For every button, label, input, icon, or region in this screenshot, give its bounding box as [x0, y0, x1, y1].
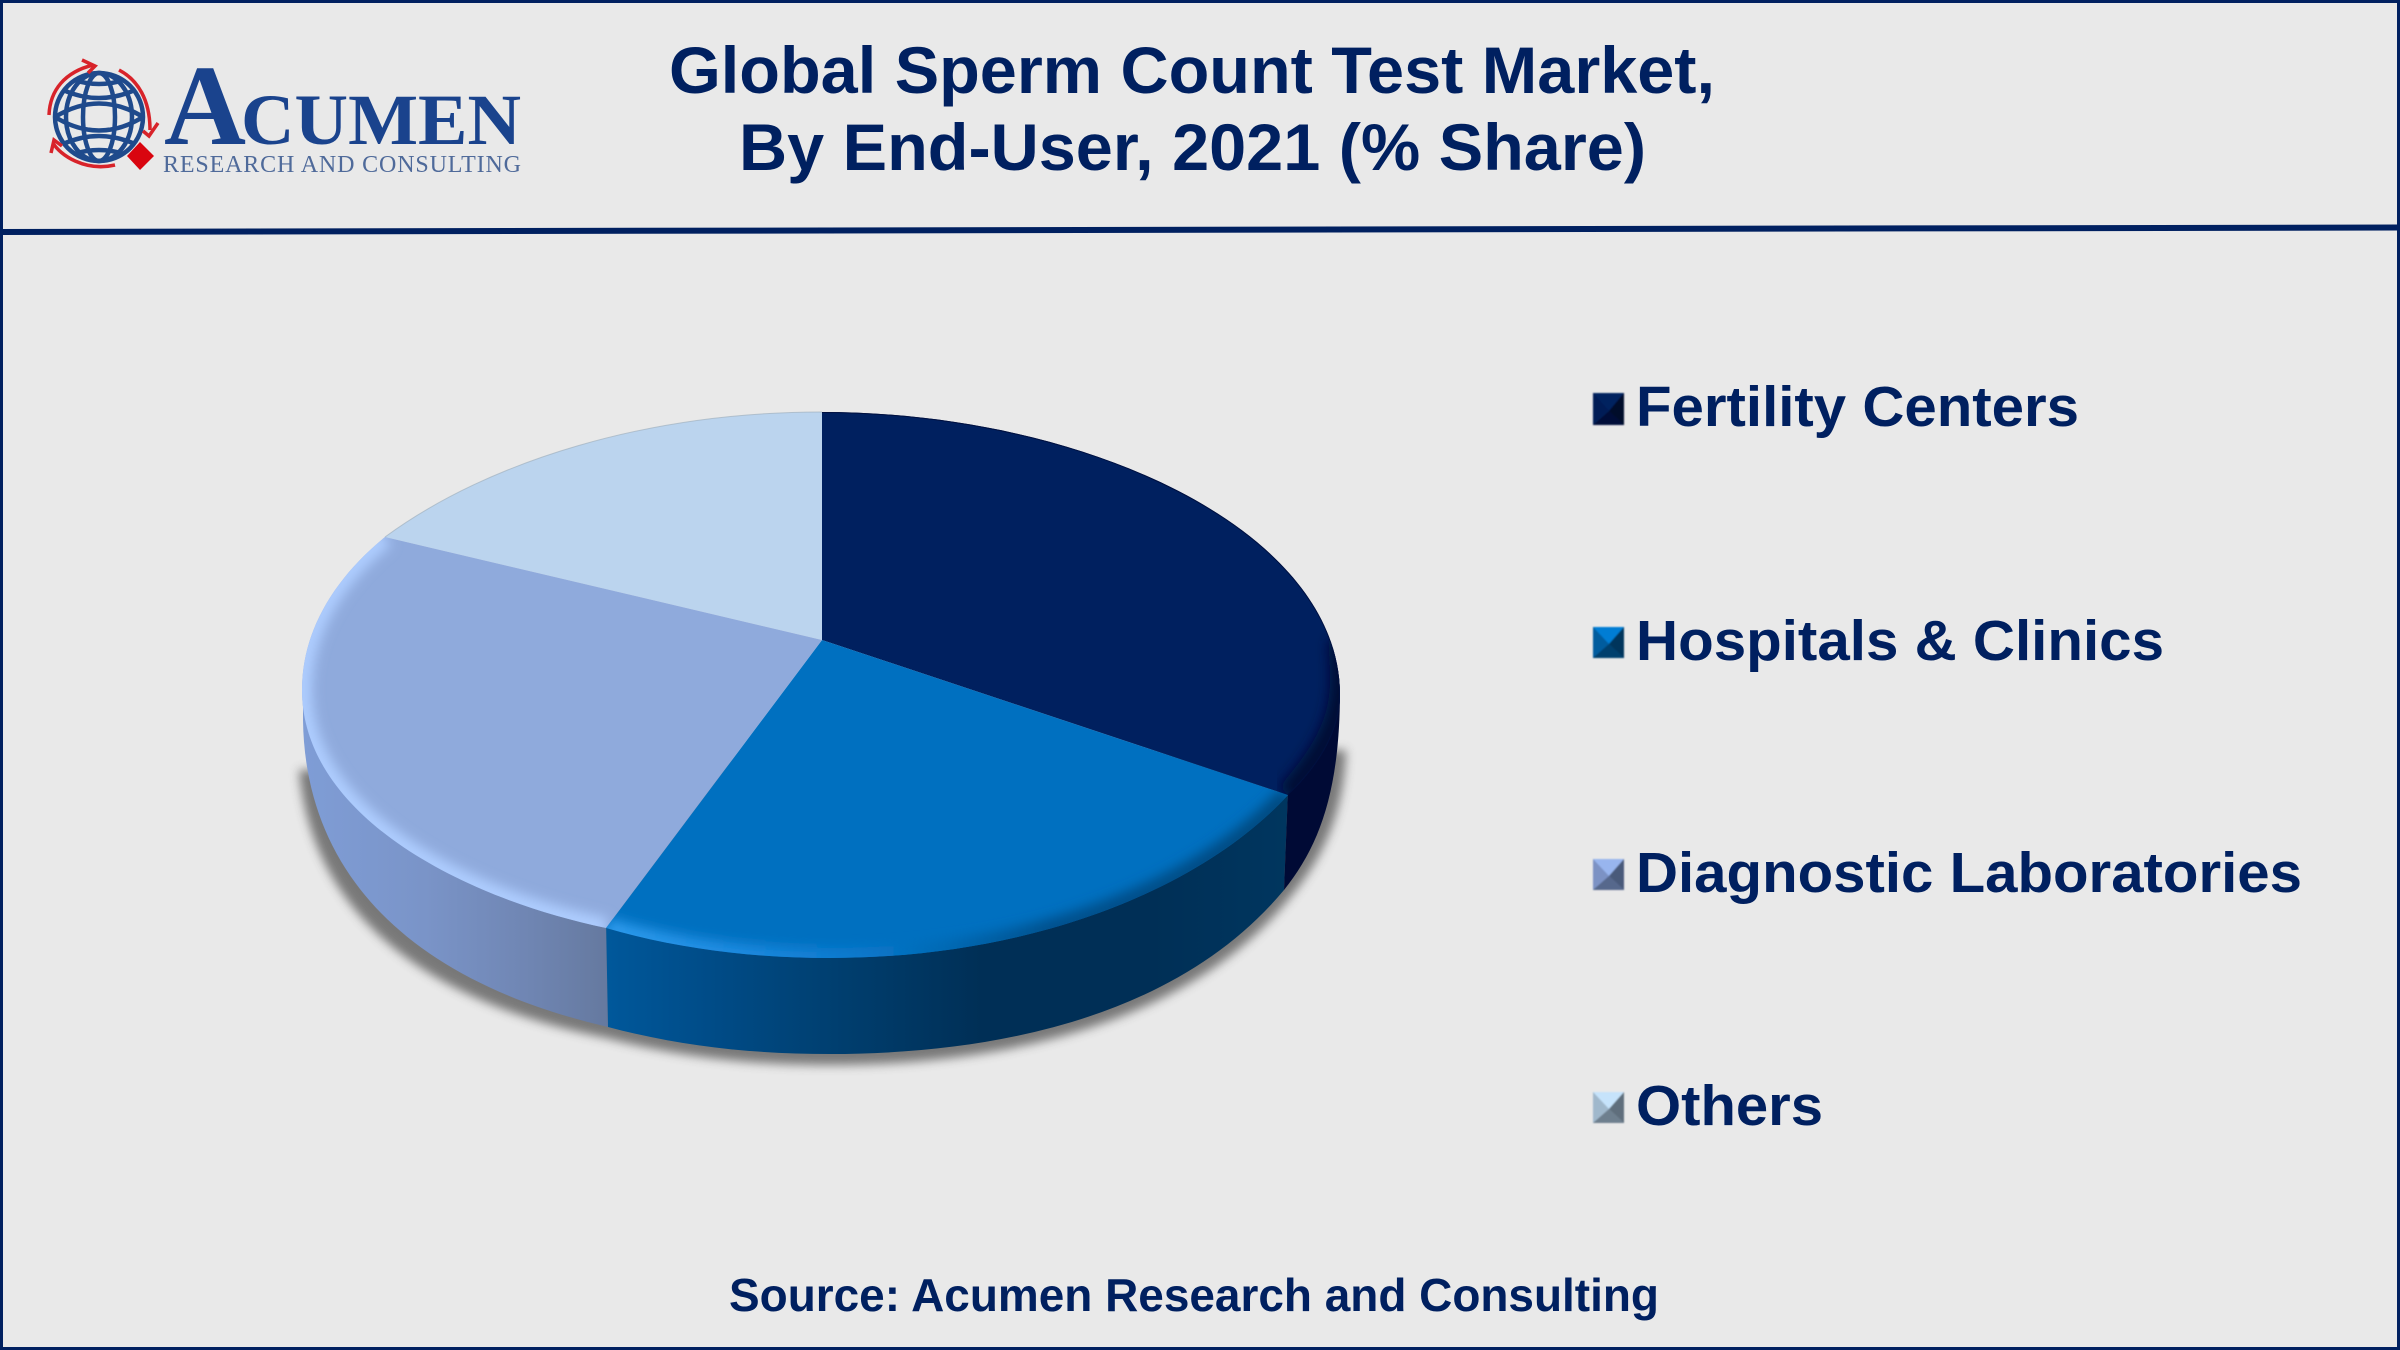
legend label: Others [1636, 1074, 1823, 1138]
header divider [0, 224, 2400, 235]
icon: globe with red arrows [49, 60, 158, 170]
title [669, 33, 1715, 184]
side: diagnostic laboratories [303, 690, 608, 1027]
bevel highlight: diagnostic laboratories [302, 537, 606, 928]
pie drop shadow [299, 750, 1346, 1065]
logo: Acumen Research and Consulting [49, 42, 521, 178]
side: hospitals and clinics [606, 790, 1288, 1054]
source line: Source: Acumen Research and Consulting [729, 1269, 1659, 1321]
legend item: Hospitals & Clinics [1593, 609, 2164, 673]
legend item: Others [1593, 1074, 1823, 1138]
slice: hospitals and clinics [606, 640, 1288, 958]
legend swatch [1593, 393, 1624, 425]
legend label: Diagnostic Laboratories [1636, 841, 2302, 905]
logo tagline: RESEARCH AND CONSULTING [163, 152, 521, 178]
logo wordmark small caps: CUMEN [241, 80, 521, 160]
legend swatch [1593, 859, 1624, 890]
title: Global Sperm Count Test Market, [669, 33, 1715, 107]
side: fertility centers [1284, 690, 1340, 890]
legend item: Fertility Centers [1593, 375, 2079, 439]
bevel highlight: hospitals and clinics [606, 795, 1288, 958]
bevel shade: fertility centers [822, 412, 1342, 795]
legend swatch [1593, 1092, 1624, 1123]
slice: diagnostic laboratories [302, 537, 822, 928]
legend swatch [1593, 627, 1624, 658]
logo wordmark: A [164, 42, 246, 169]
title: By End-User, 2021 (% Share) [739, 110, 1646, 184]
slice: others [385, 412, 822, 640]
3D pie chart [299, 412, 1346, 1065]
legend item: Diagnostic Laboratories [1593, 841, 2302, 905]
legend label: Hospitals & Clinics [1636, 609, 2164, 673]
slice: fertility centers [822, 412, 1340, 795]
legend label: Fertility Centers [1636, 375, 2079, 439]
edge line: others [385, 412, 822, 537]
legend [1593, 375, 2302, 1138]
